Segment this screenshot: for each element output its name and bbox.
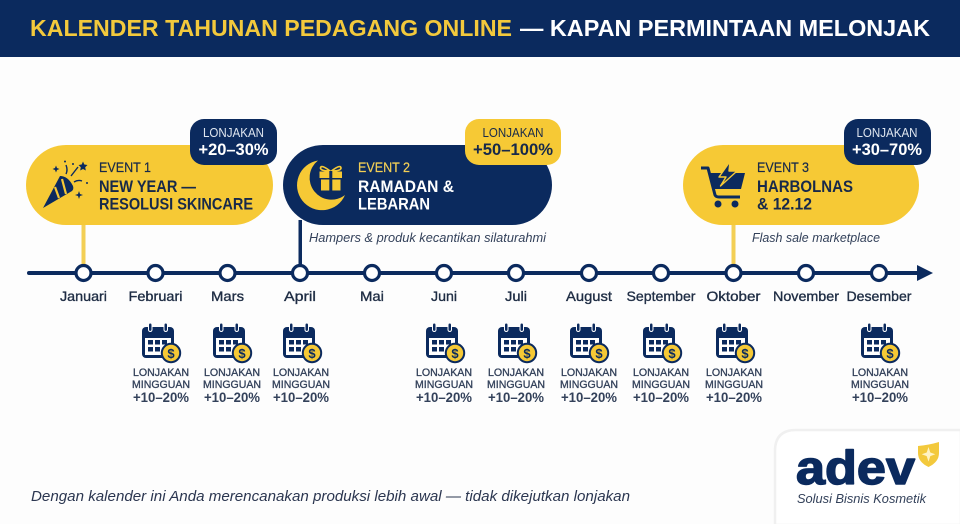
connector: event 3 [732, 224, 736, 266]
weekly spike: April [272, 323, 330, 405]
month labels: Mars [211, 288, 244, 304]
weekly spike: Juni: MINGGUAN [415, 379, 473, 391]
badge: lonjakan event 3 [844, 119, 931, 165]
weekly spike: Mars: +10–20% [204, 389, 261, 405]
weekly spike: September: MINGGUAN [632, 379, 690, 391]
weekly spike: Mars: MINGGUAN [203, 379, 261, 391]
logo card: adev: Solusi Bisnis Kosmetik [797, 491, 927, 506]
panel: event 3 harbolnas: EVENT 3 [757, 159, 809, 175]
weekly spike: Februari [132, 323, 190, 405]
panel: event 3 harbolnas: HARBOLNAS [757, 178, 853, 196]
weekly spike: Juli: MINGGUAN [487, 379, 545, 391]
weekly spike: Desember: LONJAKAN [852, 367, 908, 379]
weekly spike: August [560, 323, 618, 405]
month labels: Mai [360, 288, 384, 304]
badge: lonjakan event 3: LONJAKAN [856, 126, 918, 140]
logo card: adev [775, 430, 960, 524]
badge: lonjakan event 1 [190, 119, 277, 165]
month labels: Juni [431, 288, 457, 304]
weekly spike: Februari: MINGGUAN [132, 379, 190, 391]
weekly spike: Februari: +10–20% [133, 389, 190, 405]
weekly spike: August: LONJAKAN [561, 367, 617, 379]
month labels: Juli [505, 288, 527, 304]
weekly spike: Oktober: MINGGUAN [705, 379, 763, 391]
weekly spike: April: MINGGUAN [272, 379, 330, 391]
logo card: adev: adev [796, 441, 915, 494]
weekly spike: Juli: +10–20% [488, 389, 545, 405]
weekly spike: Desember: +10–20% [852, 389, 909, 405]
panel: event 1 new year [26, 145, 273, 225]
weekly spike: Oktober: +10–20% [706, 389, 763, 405]
panel: event 1 new year: NEW YEAR — [99, 178, 196, 196]
badge: lonjakan event 1: LONJAKAN [203, 126, 264, 140]
month labels: Desember [846, 288, 912, 304]
panel: event 3 harbolnas: & 12.12 [757, 196, 812, 214]
weekly spike: Juni [415, 323, 473, 405]
month labels [60, 288, 912, 304]
badge: lonjakan event 2 [465, 119, 561, 165]
note: event 3: Flash sale marketplace [752, 231, 880, 245]
panel: event 3 harbolnas [683, 145, 919, 225]
badge: lonjakan event 2: LONJAKAN [482, 126, 544, 140]
month labels: April [284, 288, 316, 304]
note: event 2: Hampers & produk kecantikan silaturahmi [309, 231, 547, 245]
badge: lonjakan event 2: +50–100% [473, 140, 553, 159]
header banner: — KAPAN PERMINTAAN MELONJAK [520, 15, 930, 41]
month labels: Februari [128, 288, 182, 304]
weekly spike: April: LONJAKAN [273, 367, 329, 379]
month labels: September [626, 288, 696, 304]
weekly spike: Desember [851, 323, 909, 405]
panel: event 1 new year: RESOLUSI SKINCARE [99, 196, 253, 214]
weekly spike: August: +10–20% [561, 389, 618, 405]
month labels: November [773, 288, 839, 304]
weekly spike: September: LONJAKAN [633, 367, 689, 379]
weekly spike: Juni: LONJAKAN [416, 367, 472, 379]
weekly spike: September [632, 323, 690, 405]
icon: party popper [43, 160, 88, 208]
month labels: August [566, 288, 612, 304]
header banner [0, 0, 960, 57]
panel: event 1 new year: EVENT 1 [99, 159, 151, 175]
timeline month nodes [76, 266, 886, 280]
weekly spike: Februari: LONJAKAN [133, 367, 189, 379]
weekly spike: Mars: LONJAKAN [204, 367, 260, 379]
weekly spike: Mars [203, 323, 261, 405]
panel: event 2 ramadan: LEBARAN [358, 196, 430, 214]
timeline axis with arrow [27, 265, 933, 281]
connector: event 1 [82, 224, 86, 266]
badge: lonjakan event 3: +30–70% [852, 140, 922, 159]
connector: event 2 [298, 220, 302, 266]
panel: event 2 ramadan: RAMADAN & [358, 178, 454, 196]
weekly spike: April: +10–20% [273, 389, 330, 405]
weekly spike: Oktober: LONJAKAN [706, 367, 762, 379]
weekly spike: Juli: LONJAKAN [488, 367, 544, 379]
footer note: Dengan kalender ini Anda merencanakan produksi lebih awal — tidak dikejutkan lonjakan [31, 488, 630, 505]
weekly spike: Juli [487, 323, 545, 405]
month labels: Januari [60, 288, 107, 304]
icon: shopping cart with bolt [701, 162, 745, 208]
header banner: KALENDER TAHUNAN PEDAGANG ONLINE [30, 15, 512, 41]
icon: gold shield [918, 442, 939, 467]
icon: crescent and gift [297, 160, 345, 210]
panel: event 2 ramadan [283, 145, 552, 225]
weekly spike: Juni: +10–20% [416, 389, 473, 405]
weekly spike: Desember: MINGGUAN [851, 379, 909, 391]
weekly spike: September: +10–20% [633, 389, 690, 405]
month labels: Oktober [706, 288, 761, 304]
weekly spike: Oktober [705, 323, 763, 405]
panel: event 2 ramadan: EVENT 2 [358, 159, 410, 175]
weekly spike: August: MINGGUAN [560, 379, 618, 391]
badge: lonjakan event 1: +20–30% [198, 140, 268, 159]
